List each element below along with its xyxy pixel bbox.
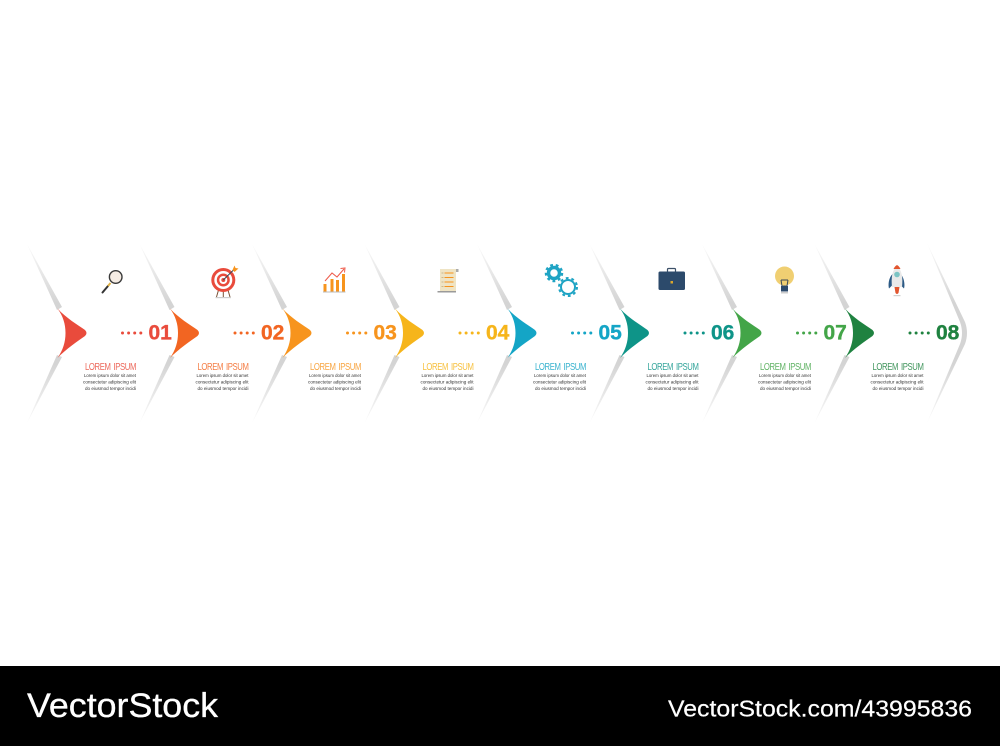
number 03: 03 <box>374 322 397 344</box>
body text 06 <box>646 373 699 391</box>
step 03 <box>252 244 397 423</box>
body text 05: do eiusmod tempor incidi <box>535 386 586 391</box>
connector dots 08 <box>908 332 930 334</box>
icon: target <box>211 266 238 298</box>
body text 05: Lorem ipsum dolor sit amet <box>534 373 587 378</box>
heading 06: LOREM IPSUM <box>648 362 699 373</box>
connector dots 01 <box>121 332 142 334</box>
body text 01: consectetur adipiscing elit <box>83 380 137 384</box>
body text 02: Lorem ipsum dolor sit amet <box>196 373 249 378</box>
body text 05: consectetur adipiscing elit <box>533 380 587 384</box>
body text 04: consectetur adipiscing elit <box>420 380 474 384</box>
connector dots 02 <box>234 332 255 334</box>
icon: light bulb <box>775 266 794 294</box>
body text 07: Lorem ipsum dolor sit amet <box>759 373 812 378</box>
body text 01: do eiusmod tempor incidi <box>85 386 136 391</box>
closing chevron <box>927 243 967 423</box>
chevron divider 07 <box>702 244 737 423</box>
body text 08: consectetur adipiscing elit <box>870 380 924 384</box>
body text 03 <box>308 373 362 391</box>
icon: gears <box>546 265 577 296</box>
heading 01: LOREM IPSUM <box>85 362 136 373</box>
number 04: 04 <box>486 322 510 344</box>
connector dots 05 <box>571 332 592 334</box>
connector dots 06 <box>684 332 705 334</box>
arrow marker 01 <box>58 308 86 358</box>
body text 07: do eiusmod tempor incidi <box>760 386 811 391</box>
heading 07: LOREM IPSUM <box>760 362 811 373</box>
step 04 <box>364 244 510 423</box>
connector dots 04 <box>458 332 480 334</box>
chevron divider 06 <box>590 244 624 423</box>
body text 06: do eiusmod tempor incidi <box>648 386 698 391</box>
number 02: 02 <box>261 322 284 344</box>
body text 08 <box>870 373 924 391</box>
heading 03: LOREM IPSUM <box>310 362 361 373</box>
body text 07 <box>758 373 812 391</box>
body text 03: do eiusmod tempor incidi <box>310 386 361 391</box>
icon: briefcase <box>658 268 685 290</box>
footer brand: VectorStock <box>27 687 219 725</box>
arrow marker 07 <box>732 308 762 358</box>
chevron divider 08 <box>814 244 850 423</box>
body text 02: do eiusmod tempor incidi <box>198 386 248 391</box>
connector dots 03 <box>346 332 367 334</box>
body text 04: do eiusmod tempor incidi <box>422 386 474 391</box>
body text 01: Lorem ipsum dolor sit amet <box>84 373 137 378</box>
chevron divider 05 <box>477 244 512 423</box>
chevron divider 01 <box>27 244 62 423</box>
heading 04: LOREM IPSUM <box>422 362 474 373</box>
number 08: 08 <box>936 322 960 344</box>
body text 06: Lorem ipsum dolor sit amet <box>646 373 699 378</box>
body text 08: do eiusmod tempor incidi <box>872 386 924 391</box>
step 02 <box>140 244 284 423</box>
step 08 <box>814 244 960 423</box>
arrow marker 06 <box>620 308 649 358</box>
chevron divider 02 <box>140 244 174 423</box>
body text 05 <box>533 373 587 391</box>
body text 03: consectetur adipiscing elit <box>308 380 362 384</box>
connector dots 07 <box>796 332 817 334</box>
step 05 <box>477 244 622 423</box>
body text 01 <box>83 373 137 391</box>
body text 04 <box>420 373 474 391</box>
icon: checklist document <box>438 269 458 292</box>
number 07: 07 <box>824 322 847 344</box>
body text 07: consectetur adipiscing elit <box>758 380 812 384</box>
arrow marker 02 <box>170 308 199 358</box>
body text 02 <box>196 373 249 391</box>
chevron divider 04 <box>364 244 400 423</box>
footer image id: VectorStock.com/43995836 <box>668 696 972 722</box>
chevron divider 03 <box>252 244 287 423</box>
body text 02: consectetur adipiscing elit <box>196 380 249 384</box>
footer bar <box>0 666 1000 746</box>
number 05: 05 <box>598 322 622 344</box>
heading 05: LOREM IPSUM <box>535 362 586 373</box>
icon: bar chart <box>323 268 346 292</box>
body text 08: Lorem ipsum dolor sit amet <box>872 373 924 378</box>
heading 08: LOREM IPSUM <box>872 362 924 373</box>
step 01 <box>27 244 172 423</box>
arrow marker 03 <box>282 308 312 358</box>
icon: magnifying glass <box>102 271 122 292</box>
icon: rocket <box>889 265 904 296</box>
body text 03: Lorem ipsum dolor sit amet <box>309 373 362 378</box>
arrow marker 04 <box>395 308 424 358</box>
arrow marker 05 <box>508 308 536 358</box>
step 07 <box>702 244 847 423</box>
heading 02: LOREM IPSUM <box>198 362 249 373</box>
body text 06: consectetur adipiscing elit <box>646 380 699 384</box>
number 06: 06 <box>711 322 734 344</box>
body text 04: Lorem ipsum dolor sit amet <box>422 373 474 378</box>
arrow marker 08 <box>845 308 874 358</box>
step 06 <box>590 244 734 423</box>
number 01: 01 <box>148 322 172 344</box>
